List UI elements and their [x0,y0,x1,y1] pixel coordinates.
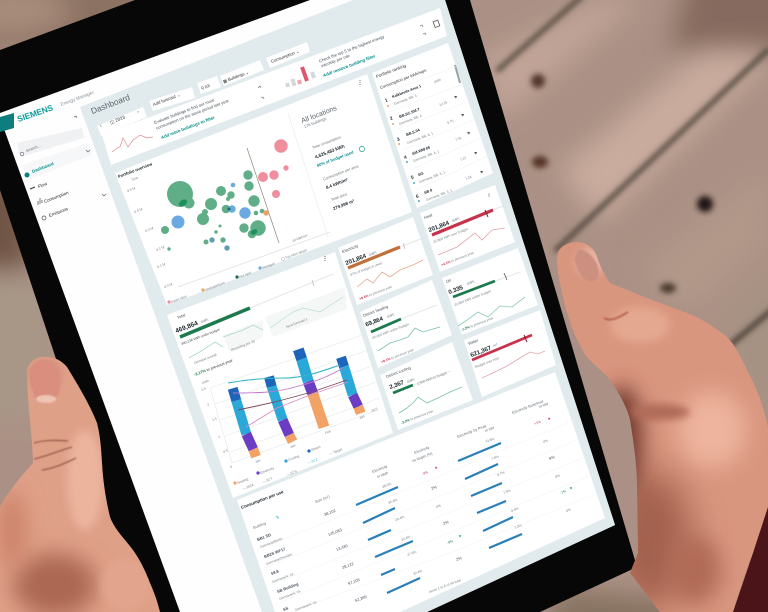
panel: consumption per use table [237,372,605,612]
baseload deviation values: 0% [555,474,561,479]
axis labels: Jan [359,414,365,420]
card value: 2,367 [389,380,406,391]
nav: emissions: Emissions [48,206,69,218]
axis labels: 1 [218,435,221,439]
card value: kWh [407,378,415,384]
panel: oil [442,248,538,335]
plank gaps [498,0,768,345]
forecast tiles: Next forecast 1 [286,317,308,329]
axis labels [201,379,378,469]
grid and axes [210,335,380,463]
card value: kWh [387,313,395,319]
chart legend: — 22 Z [307,457,318,465]
forecast tiles [189,287,347,365]
chart legend: Top sites target [285,248,308,260]
date chip: ◫ 2023 [109,114,126,125]
date chip: ‹ [99,123,103,128]
sleeve [733,507,768,612]
card value: m³ [493,342,499,348]
building names: Germany/4, 16 [279,589,301,601]
rank rows: 3 [396,136,401,142]
table headers: Electricity [372,464,388,474]
trend: +4.1% to previous year [441,250,475,267]
nav: consumption: Consumption [43,190,70,204]
card value: 69,864 [365,316,385,328]
sidebar navigation [17,116,106,220]
panel: electricity [338,217,433,305]
electricity percentages [382,482,423,576]
nav: flow: Flow [37,181,48,189]
trend: +8.4% to previous year [359,284,393,301]
trend: -3.17% to previous year [193,357,234,377]
progress bar [432,205,505,235]
bar: fourth [341,357,361,413]
bubble chart [161,139,289,251]
chart legend: — Target [329,447,343,456]
rank rows: Kalkbreite Area 1 [392,84,422,99]
axis labels: Jan [255,458,261,464]
card value [345,251,377,267]
building names: Germany/4, 19 [272,572,294,584]
all locations summary: 279,998 m² [332,198,355,211]
peak percentages: 7.2% [514,523,522,530]
rank rows: Germany, BB, 3, 1 [419,170,446,184]
sparkline [438,228,505,255]
all locations summary: Total area [331,192,348,202]
axis labels: 1.5 [212,417,218,422]
axis labels: 24.5 [371,407,378,413]
bar: first [233,388,256,457]
divider [288,113,328,237]
electricity percentages: 38.6% [382,482,392,489]
chart legend: Asset sites [171,294,188,304]
icon: trash [433,20,440,28]
bar: second [269,377,293,442]
target deviation values: 2% [455,555,463,562]
rank rows: SM.WW.06 [412,145,431,156]
card value [448,280,475,296]
axis labels: 0.4 M [134,207,143,214]
electricity percentages: 32.4% [413,569,423,576]
baseload deviation values: -1% [560,489,567,495]
icon: panel menu [324,256,326,261]
forecast chip: Add forecast ⌄ [152,92,181,107]
axis labels: 2 [207,403,210,407]
app header [0,90,95,132]
table headers: Electricity Baseload [512,399,544,415]
chart legend [233,445,343,491]
sparkline [458,297,525,326]
card value: kWh [201,318,209,324]
page title: Dashboard [89,92,132,116]
axis labels: Jan [290,443,296,449]
chart legend: Heating [237,477,249,485]
knuckle creases [34,440,76,470]
target deviation values: 2% [430,484,438,491]
card label: Oil [445,278,452,284]
all locations summary: Consumption per area [323,164,360,182]
search box: Search... [26,144,41,153]
axis labels [127,176,173,289]
all locations summary: 4,625,483 kWh [314,144,346,160]
peak percentages: 8.4% [511,506,519,513]
target deviation values: -8% [422,470,429,476]
panel title: Portfolio overview [117,161,154,179]
card value: 201,864 [345,253,368,267]
chart legend: Manager [262,261,276,270]
rank rows: 7.27 [460,156,467,162]
building names: Germany/4, 16 [295,600,317,612]
rank rows: Germany, BB, 8, 1 [407,131,434,145]
trend lines [228,365,348,427]
table headers: ⇅ [276,515,281,520]
thumbnail [30,361,60,402]
budget note: 2,900 kWh to budget [417,371,447,386]
panel: portfolio overview [115,74,412,305]
building names: Germany/Berlin [260,537,283,549]
axis labels: 0 [230,465,233,469]
all locations summary: 176 buildings [303,116,327,129]
peak percentages [485,437,522,530]
strip description: Evaluate buildings to find out more [153,97,216,125]
panel: summary strip [102,8,447,165]
size values: 13,430 [335,543,349,552]
peak percentages: 7.5% [503,488,511,495]
table footer: Items 1 to 6 of 40 total [429,578,462,594]
row dividers [257,420,600,612]
chart legend: Underperform [205,281,226,292]
building names: Germany/Dresden [266,552,293,566]
baseload deviation values: ▼ [568,485,574,491]
card value [470,342,499,359]
chart legend: Electricity [260,466,275,475]
trend: +8.1% to previous year [381,347,415,364]
consumption chip: Consumption ⌄ [270,49,300,64]
rank rows: BB.S.04 [406,128,421,137]
sparkline [399,387,462,413]
table headers: in kWh [377,471,389,479]
icon: panel menu [359,80,361,85]
location chip: ⚲ All [200,83,210,91]
card value [365,313,395,328]
progress bar [348,238,423,268]
ranking title: Portfolio ranking [375,63,407,79]
chart legend: Hot spot [239,271,252,279]
app name: Energy Manager [60,90,95,108]
rank rows: BB.SC.SM.T [399,107,421,119]
card value: 469,864 [174,320,199,335]
panel: heat [420,185,515,272]
card value: kWh [369,251,377,257]
target deviation values: 0% [436,504,442,509]
electricity bars [356,487,420,593]
forecast chip [149,87,195,111]
target line [247,148,279,243]
rank rows: 9.75 [447,119,454,125]
baseload deviation values: 9% [548,454,556,461]
axis labels: 2.5 [201,387,207,392]
strip description: consumption on the same period last year [155,98,230,130]
building names: SB Building [276,581,300,594]
peak percentages: 7.6% [491,454,499,461]
trend: -1.2% to previous year [461,316,494,332]
baseload deviation values: ▲ [546,415,552,421]
menu button [0,113,14,132]
card label: District cooling [385,365,411,379]
table title: Consumption per use [240,489,285,510]
progress bar [453,272,520,297]
budget note: 300,136 kWh under budget [181,328,220,346]
rank rows: 5 [410,174,415,180]
card value [389,378,415,391]
rank rows: 1 [384,97,389,103]
rank rows: ⚑ [466,130,471,136]
all locations summary: Total consumption [312,135,342,150]
all locations summary: 8.4 kWh/m² [325,177,349,190]
all locations summary: All locations [300,105,338,125]
rank rows: Germany, BB, 3, 1 [426,188,453,202]
sparkline [112,135,153,152]
right hand [557,242,768,612]
rank rows: ⚑ [460,112,465,118]
rank rows: 7.24 [465,175,472,181]
axis labels: 0.2 M [156,245,165,252]
stacked bar chart [201,335,380,491]
chart legend: — 2024 [242,483,254,491]
chart legend: Steam [311,445,321,452]
forecast tiles: Demand overall [194,353,217,365]
building names: BB1 SD [256,532,272,542]
axis labels: kWh [202,379,209,385]
ranking subtitle: Consumption per kWh/sqm [379,67,428,90]
card value: kWh [467,280,475,286]
target deviation values: ▼ [457,533,463,539]
table headers: Building [253,521,267,530]
table headers: vs target (%) [412,451,434,463]
rank rows: ⚑ [473,150,478,156]
axis labels: Feb [325,429,332,435]
table headers: in kW [485,426,495,433]
axis value: 10 kWh/m² [292,233,309,243]
consumption chip [266,42,310,68]
content background [80,0,615,612]
baseload deviation values: 0% [566,508,572,513]
table headers: Electricity by Peak [457,424,487,439]
axis labels: 0.5 M [127,186,136,193]
chart legend [167,248,308,304]
card value [428,217,460,234]
rank rows: 4 [403,154,408,160]
thumbnail [574,250,599,282]
panel: total consumption [167,252,393,498]
peak percentages: 6.7% [497,470,505,477]
table headers: Size (m²) [315,494,331,504]
axis labels: 0.1 M [157,262,166,269]
budget note: 22,800 kWh under budget [454,289,491,307]
electricity percentages: 32.4% [401,535,411,542]
chart legend: — 22 S [286,469,298,477]
target deviation values: ▲ [433,464,439,470]
sparkline [378,327,440,351]
target deviation values: 2% [442,519,450,526]
table headers: Electricity [414,445,430,455]
rank rows: Germany, BB, 4, 1 [413,149,440,163]
size values: 97,105 [347,577,361,586]
add buildings link: Add more buildings to filter [160,115,216,140]
card value [174,318,209,335]
sparkline [357,260,423,287]
building names [256,532,317,612]
card value: 0.335 [448,285,465,296]
card label: District heating [362,304,389,318]
panel: portfolio ranking [372,43,493,208]
date chip: › [136,109,140,114]
progress bar [472,335,532,360]
sparkline [482,351,545,378]
card label: Water [467,337,479,346]
rank rows: SG [418,171,424,177]
rank rows: ⚑ [479,169,484,175]
all locations summary: 80% of budget used [316,149,355,168]
trend: -2.2% to previous year [401,409,434,425]
axis labels: 0.3 M [145,226,154,233]
baseload deviation values [534,415,574,513]
rank rows: 7.91 [455,136,462,142]
baseload deviation values: 0% [543,439,549,444]
rank rows: 6 [415,193,420,199]
location chip [197,76,221,94]
wood knots [531,74,713,293]
baseload deviation values: +1% [534,420,541,426]
Siemens logo: SIEMENS [16,102,55,124]
electricity percentages: 35.4% [388,498,398,505]
strip note: Check the top 5 to the highest energy [318,34,386,63]
rank rows: Germany, BB, 3 [394,94,417,106]
electricity percentages: 29.4% [395,515,405,522]
buildings chip: ▦ Buildings ⌄ [222,69,250,84]
card value: 201,864 [428,220,451,234]
axis labels: 0.0 M [164,282,173,289]
rank rows: 12.25 [439,100,448,107]
mini bar chart [287,67,314,87]
buildings chip [220,60,264,86]
size values: 28,122 [341,561,355,570]
progress bar [371,305,437,332]
strip note: intensity per use [320,53,351,68]
add remove link: Add/ remove building filter [322,53,376,78]
panel: district cooling [380,342,473,430]
progress bar [393,371,450,393]
card value: 621,367 [470,345,493,359]
target deviation values [422,464,463,562]
size values [323,508,368,603]
panel: water [464,310,556,397]
panel: district heating [360,280,452,368]
nav: dashboard: Dashboard [31,161,55,174]
chart legend: Cooling [288,454,300,462]
peak percentages: 73.8% [485,437,495,444]
budget note: 97% of budget is used [350,261,382,277]
size values: 52,395 [354,594,368,603]
building names: SS [282,605,289,612]
budget note: Budget over limit [475,356,500,369]
electricity percentages: 27.6% [407,550,417,557]
selected item band [22,143,92,180]
table headers: in kW [539,402,549,409]
slider axis [178,232,330,287]
left hand [0,357,160,612]
peak bars [458,443,522,548]
rank rows: ⚑ [453,94,458,100]
rank rows: SB 8 [424,188,433,195]
building names: BB2S WF17 [263,546,287,559]
chart legend: — 22 Y [262,476,274,484]
axis labels: 0.5 [223,449,229,454]
card label: Total [176,312,186,320]
rank rows [384,84,484,202]
card value: kWh [452,217,460,223]
knuckle crease [604,312,628,320]
building names: 59.8 [270,568,280,576]
date chip [97,107,147,136]
rank rows: 2 [389,115,394,121]
target deviation values: -8% [447,539,454,545]
progress bar [180,274,333,337]
bar: third [298,349,324,427]
card label: Heat [423,212,434,220]
table headers [253,399,549,530]
filter chips [97,42,310,136]
panel: portfolio ranking: kWh [434,78,441,84]
forecast tiles: Recycling per 30 [231,339,256,352]
size values: 38,102 [323,508,337,517]
budget note: 22,800 kWh over budget [433,227,469,244]
scrollbar [455,65,460,83]
budget note: 45,000 kWh under budget [372,322,409,340]
all locations summary [300,105,365,211]
rank rows: Germany, BB, 4 [399,114,422,126]
card label: Electricity [341,243,359,254]
size values: 145,083 [327,527,343,537]
axis labels: Tons [131,176,139,182]
